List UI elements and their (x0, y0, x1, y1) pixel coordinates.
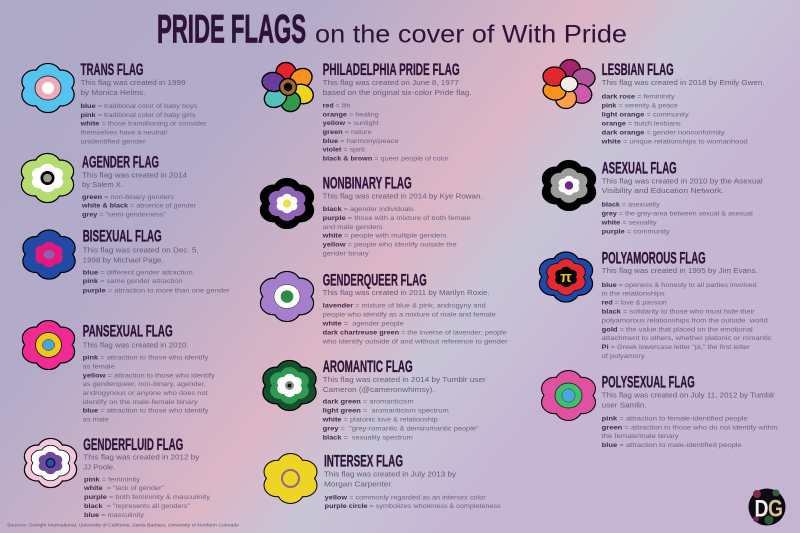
text block (323, 78, 472, 163)
text block: blue = traditional color of baby boys (80, 103, 198, 110)
text block: white = platonic love & relationship (322, 416, 438, 423)
text block: light green = aromanticism spectrum (323, 408, 449, 415)
text block: yellow = attraction to those who identify (83, 372, 216, 379)
icon: philadelphia flower (261, 62, 316, 112)
text block: blue = attraction to male-identified people (602, 442, 742, 449)
text block: pink = same gender attraction (83, 278, 183, 285)
icon: DG logo (748, 488, 786, 526)
text block: themselves have a neutral/ (80, 130, 168, 136)
text block: black = sexuality spectrum (323, 434, 413, 441)
heading: POLYSEXUAL FLAG (602, 373, 695, 392)
text block: violet = spirit (323, 147, 365, 154)
text block: blue = masculinity (84, 512, 145, 519)
text block: who identify outside of and without reference to gender (322, 338, 509, 345)
text block: by Salem X. (82, 180, 123, 189)
heading: ASEXUAL FLAG (602, 159, 677, 178)
text block: red = life (323, 102, 351, 109)
text block (324, 470, 501, 510)
title (157, 8, 627, 52)
text block: yellow = sunlight (323, 120, 379, 127)
text block: of polyamory (602, 353, 646, 360)
icon: trans flower (22, 64, 74, 112)
text block: the female/male binary (602, 433, 680, 440)
heading: PHILADELPHIA PRIDE FLAG (323, 60, 460, 79)
text block: This flag was created in 1999 (80, 78, 186, 87)
text block: lavender = mixture of blue & pink; androgyny and (323, 303, 486, 310)
text block: This flag was created in July 2013 by (324, 470, 456, 479)
text block: purple circle = symbolizes wholeness & completeness (325, 503, 501, 510)
text block: dark chartreuse green = the inverse of lavender; people (323, 329, 507, 336)
text block: This flag was created in 1995 by Jim Evans. (602, 266, 758, 275)
icon: genderqueer flower (261, 272, 313, 321)
text block: identify on the male-female binary (83, 399, 199, 406)
text block: This flag was created on July 11, 2012 by Tumblr (602, 391, 775, 400)
text block: green = attraction to those who do not identify within (602, 424, 778, 431)
text block: This flag was created in 2010. (83, 340, 189, 349)
text block: gender binary (323, 251, 370, 258)
panel: intersex flag (265, 452, 501, 510)
text block: light orange = community (602, 112, 690, 119)
text block: based on the original six-color Pride flag. (323, 88, 472, 97)
text block: white = "lack of gender" (83, 485, 164, 492)
icon: agender flower (22, 154, 73, 202)
text block (322, 375, 486, 441)
text block (601, 176, 763, 235)
title: on the cover of With Pride (315, 21, 627, 49)
text block: blue = different gender attraction (83, 269, 193, 276)
text block: white = agender people (322, 320, 404, 327)
text block: pink = serenity & peace (602, 103, 678, 110)
text block: blue = openess & honesty to all parties involved (602, 282, 757, 289)
text block: pink = attraction to those who identify (83, 355, 209, 362)
text block: as genderqueer, non-binary, agender, (83, 381, 206, 388)
heading: AROMANTIC FLAG (323, 357, 413, 376)
icon: aromantic flower (264, 361, 315, 410)
text block: as female (83, 363, 115, 370)
text block: dark green = aromanticism (323, 399, 414, 406)
text block: pink = attraction to female-identified people (602, 415, 748, 422)
text block: This flag was created in 2014 (82, 170, 187, 179)
text block: gold = the value that placed on the emotional (602, 326, 753, 333)
text block: Visibility and Education Network. (602, 186, 724, 195)
text block: blue = harmony/peace (323, 138, 399, 145)
text block: orange = butch lesbians (602, 120, 681, 127)
text block: by Monica Helms. (80, 88, 146, 97)
text block: Cameron (@cameronwhimsy). (323, 385, 435, 394)
panel: philadelphia pride flag (261, 60, 472, 163)
text block: purple = those with a mixture of both female (323, 215, 471, 222)
text block: purple = community (602, 228, 671, 235)
text block: black = agender individuals (323, 206, 414, 213)
text block: attachment to others, whether platonic or romantic (602, 335, 773, 342)
icon: DG logo: G (768, 496, 783, 522)
text block: yellow = commonly regarded as an intersex color (325, 494, 487, 501)
text block: Pi = Greek lowercase letter "pi," the first letter (602, 344, 751, 351)
text block: black = asexuality (602, 202, 661, 209)
text block: black = solidarity to those who must hide their (602, 309, 756, 316)
text block: dark orange = gender nonconformity (602, 129, 726, 136)
icon: polysexual flower (542, 371, 595, 420)
text block: yellow = people who identify outside the (323, 242, 457, 249)
heading: PANSEXUAL FLAG (83, 322, 173, 341)
text block (83, 453, 211, 519)
text block: This flag was created on June 8, 1977 (323, 78, 459, 87)
text block: Morgan Carpenter. (324, 479, 393, 488)
text block: pink = traditional color of baby girls (80, 112, 196, 119)
sources: Sources: Outright International, University of California, Santa Barbara, University of Northern Colorado (7, 522, 239, 527)
heading: INTERSEX FLAG (324, 452, 403, 471)
icon: DG logo: D (754, 496, 768, 522)
icon: nonbinary flower (261, 179, 313, 228)
panel: aromantic flag (264, 357, 486, 441)
text block: grey = "grey-romantic & demiromantic people" (323, 425, 479, 432)
panel: genderqueer flag (261, 270, 509, 345)
icon: asexual flower (543, 161, 595, 210)
text block: as male (83, 417, 109, 424)
text block (601, 78, 765, 145)
text block: white & black = absence of gender (81, 203, 197, 210)
heading: AGENDER FLAG (82, 152, 159, 171)
heading: GENDERQUEER FLAG (323, 270, 427, 289)
heading: TRANS FLAG (80, 60, 144, 79)
icon: genderfluid flower (25, 439, 76, 487)
text block: This flag was created in 2014 by Kye Rowan. (323, 191, 483, 200)
text block: polyamorous relationships from the outside world (602, 317, 768, 324)
text block: user Samlin. (602, 400, 647, 409)
text block: white = those transitioning or consider (79, 121, 208, 128)
text block: orange = healing (323, 111, 379, 118)
panel: polyamorous flag (540, 248, 773, 360)
panel: bisexual flag (23, 227, 231, 294)
icon: bisexual flower (23, 231, 75, 278)
heading: POLYAMOROUS FLAG (602, 248, 706, 267)
text block: 1998 by Michael Page. (83, 255, 164, 264)
text block (322, 288, 509, 345)
text block: white = unique relationships to womanhood (601, 138, 748, 145)
title: PRIDE FLAGS (157, 8, 306, 52)
icon: lesbian flower (542, 60, 595, 108)
text block: androgynous or anyone who does not (83, 390, 208, 397)
text block: black = "represents all genders" (84, 503, 190, 510)
text block: This flag was created in 2014 by Tumblr user (323, 375, 486, 384)
text block: This flag was created in 2011 by Marilyn Roxie. (323, 288, 490, 297)
heading: LESBIAN FLAG (602, 60, 674, 79)
panel: polysexual flag (542, 371, 778, 449)
panel: pansexual flag (23, 321, 216, 424)
heading: BISEXUAL FLAG (83, 227, 162, 246)
text block (83, 340, 216, 424)
panel: nonbinary flag (261, 174, 483, 258)
text block (322, 191, 483, 258)
text block: purple = attraction to more than one gender (83, 287, 231, 294)
heading: GENDERFLUID FLAG (83, 435, 183, 454)
text block: This flag was created in 2012 by (83, 453, 200, 462)
text block: This flag was created in 2018 by Emily Gwen. (602, 78, 765, 87)
text block: white = sexuality (601, 219, 658, 226)
icon: polyamorous flower (540, 253, 592, 301)
text block: green = nature (323, 129, 372, 136)
text block: people who identify as a mixture of male and female (323, 312, 496, 319)
text block: unidentified gender (80, 138, 147, 146)
text block: blue = attraction to those who identify (83, 408, 209, 415)
icon: pansexual flower (23, 321, 74, 369)
text block: white = people with multiple genders (322, 233, 447, 240)
text block: pink = femininity (84, 476, 141, 483)
text block: red = love & passion (602, 300, 667, 307)
text block (81, 170, 197, 219)
text block: in the relationships (602, 291, 665, 298)
text block: This flag was created in 2010 by the Asexual (602, 176, 763, 185)
panel: asexual flag (543, 159, 763, 235)
text block: This flag was created on Dec. 5, (83, 245, 199, 254)
panel: agender flag (22, 152, 197, 219)
text block: JJ Poole. (83, 463, 115, 472)
panel: trans flag (22, 60, 208, 146)
text block: grey = the grey-area between sexual & asexual (602, 211, 753, 218)
text block (83, 245, 231, 294)
panel: lesbian flag (542, 60, 765, 145)
icon: polyamorous flower: π (560, 269, 572, 286)
text block: and male genders (323, 224, 383, 231)
text block: dark rose = femininity (602, 94, 676, 101)
text block: grey = "semi-genderness" (82, 212, 166, 219)
text block (602, 391, 778, 449)
text block: green = non-binary genders (82, 194, 174, 201)
text block (602, 266, 773, 360)
panel: genderfluid flag (25, 435, 211, 519)
heading: NONBINARY FLAG (323, 174, 412, 193)
text block (79, 78, 208, 146)
icon: intersex flower (265, 454, 316, 503)
text block: black & brown = queer people of color (323, 156, 450, 163)
text block: purple = both femininity & masculinity (84, 494, 211, 501)
